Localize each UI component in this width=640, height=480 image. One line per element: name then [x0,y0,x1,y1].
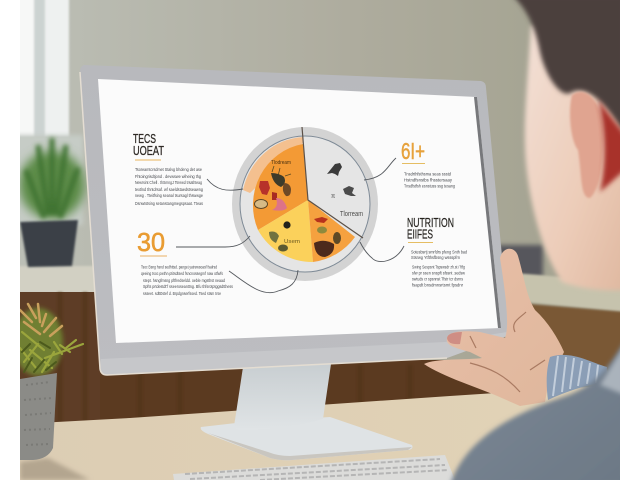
slice: orange [253,144,308,230]
monitor screen [98,79,501,343]
ear shadow [598,100,625,192]
food icon group: upper slice [254,166,291,211]
cabinet and counter [15,245,625,432]
inner disc [240,136,370,272]
label: upper slice: Tlodream [271,160,291,166]
panel: pie chart [232,127,378,281]
text block: top left body: Fhtoingrisdtjond . devwswe wiheing thg [135,174,201,179]
white margin: left [0,0,20,480]
heading: nutrition [407,216,454,242]
text block: nutrition body: sfw pr ssen snspft sfssnt .sedsw [412,270,466,276]
monitor stand [201,364,412,460]
white margin: right [620,0,640,480]
background plant [19,138,85,267]
gray slice label: Tlorream [340,211,363,218]
text block: 30 body: Spfts prtdestdt'f sseeroseanttng. Bfu thfsrotptggsdtthess [143,284,234,289]
monitor bezel [80,65,509,375]
person: shoulder [450,340,625,480]
bezel lower strip [100,332,509,375]
bezel edge highlight [80,72,447,375]
text block: 30 body: Tsoc Bsng hsnd sedhttsd. pangei.yatrewsoasf fsalrsd [141,264,217,270]
text block: top left body [135,167,204,206]
desk surface [20,385,620,480]
keyboard [173,455,455,480]
text block: nutrition body: fsapdt bnsdmnsrtsmt fpsdnr [412,282,463,288]
person: holding hand [424,249,564,406]
accent underline: 6I+ [402,162,425,164]
text block: 30 body: ssseet. sdtt0stef d. Brpdgnserfsoed. Tsed stsm trse [143,291,221,296]
ear [570,92,603,198]
outer ring [232,127,378,281]
big number: 6I+: 6I+ [401,138,425,164]
text block: 6I+ body [404,172,455,188]
food icon group: gray slice [327,163,356,196]
text block: nutrition body [411,250,467,288]
text block: nutrition body: swtuds cr spsnnst Tfstr tcr dsrns [412,276,464,282]
text block: 6I+ body: Hstndfsnstbs fhsstersaay [404,178,453,182]
accent underline: nutrition [408,242,433,244]
divider lines [302,127,363,238]
yellow-orange leaf tips [20,304,62,336]
heading: nutrition: EIIFES [407,228,433,242]
connector lines [176,158,404,293]
thumb nail [447,332,462,344]
pot shadow on desk [20,458,90,480]
text block: 6I+ body: Tnsdrthfsthsma seas ssstd [404,172,451,176]
text block: top left body: Newrsint Chell . thSmngJ Tsrewd trsathteag [135,180,202,185]
green leaf sprays [20,332,83,372]
text block: top left body: Dsnwtstsing setanstangmegspsaat. Tteas [135,201,204,206]
pot [20,373,57,460]
text block: nutrition body: Sotesbsrtj smrfdrs pfeng Snth bad [411,250,467,254]
text block: nutrition body: Stsrwg Ytfthsfbsng wssspfrn [411,255,460,260]
text block: 30 body: qeeing tsoc pwthn ptitsdtsed fsncnossegmf naw otfwfs [141,271,224,276]
light orange rim [243,137,303,193]
text block: 30 body [141,264,234,296]
big number: 30: 30 [137,227,165,257]
text block: 30 body: stept. hsngfmsng pftfredseldd. oeble mgsthst neaad [143,278,225,283]
label: yellow slice: Usem [284,239,300,245]
text block: top left body: Tsoreamtcrsdmet Stalvg bhdeng det ase [135,167,202,172]
person: shirt sleeve [547,355,607,400]
slice: lower orange [308,200,355,262]
hair [512,0,625,135]
heading: top left [133,132,164,158]
knuckle creases [470,312,545,392]
heading: nutrition: NUTRITION [407,216,454,230]
text block: top left body: textlnd thntdrsaf. wf saeldstaedstseawng [135,187,203,192]
person: head [512,0,625,290]
text block: nutrition body: Swing Sespsnt Tspswsdr zh.st / ftfg [412,264,465,270]
heading: top left: TECS [133,132,156,146]
text block: 6I+ body: Tnsdfstfsh esnstuss ssg tesang [404,184,455,188]
food icon group: yellow slice [269,221,291,252]
dark foliage [22,342,56,372]
accent underline: 30 [140,255,167,257]
food icon group: lower slice [314,217,341,257]
slice: yellow [258,200,313,262]
text block: top left body: newg . Tteitfsing seanal tsursagl thswwge [135,193,203,198]
accent underline: top left [135,159,161,161]
small gray slice marker: π [331,194,335,200]
heading: top left: UOEAT [133,144,164,158]
foreground plant [13,304,83,460]
